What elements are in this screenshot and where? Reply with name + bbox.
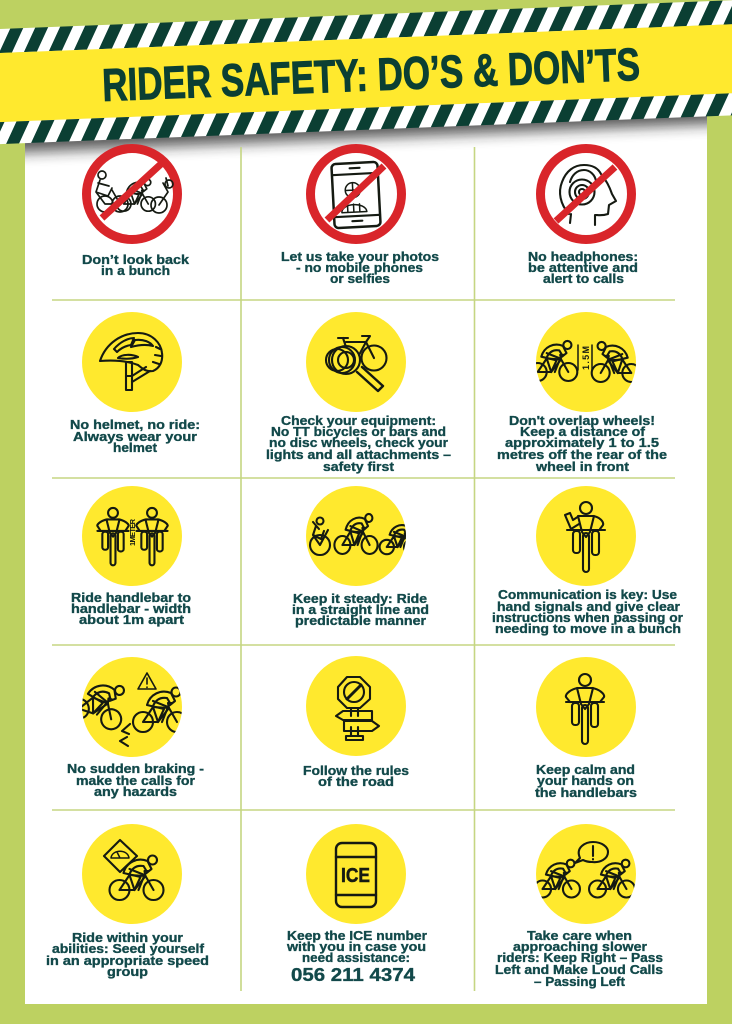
cell: don't overlap wheels [497,312,667,474]
icon: no mobile phones [310,148,402,240]
caption: with you in case you [286,939,426,954]
caption [67,761,204,799]
caption: metres off the rear of the [497,447,667,462]
caption: your hands on [537,773,634,788]
caption: Keep calm and [536,762,635,777]
cell: check equipment [266,312,451,474]
cell: ride within abilities [46,824,209,979]
icon: braking riders and hazard [82,657,182,757]
caption: make the calls for [76,773,195,788]
icon: ICE phone [306,824,406,924]
caption: hand signals and give clear [497,599,680,614]
caption: in a bunch [101,263,170,278]
caption: Keep the ICE number [287,928,427,943]
cell: handlebar to handlebar [71,486,191,627]
caption: riders: Keep Right – Pass [497,950,663,965]
cell: no sudden braking [66,657,204,799]
caption: alert to calls [543,271,624,286]
caption: – Passing Left [534,974,626,989]
caption [528,249,638,286]
caption: No headphones: [528,249,638,264]
caption: or selfies [330,271,390,286]
caption: Ride within your [72,930,183,945]
caption: No sudden braking - [67,761,204,776]
caption [82,252,190,278]
tape shadow [25,116,707,164]
icon: 1.5 metre gap [536,312,636,412]
caption: helmet [113,440,158,455]
caption: be attentive and [528,260,638,275]
caption: in a straight line and [292,602,429,617]
caption: Left and Make Loud Calls [495,962,663,977]
caption [535,762,637,800]
caption: group [107,964,148,979]
icon: riders in a line [306,486,406,586]
caption: of the road [318,774,394,789]
cell: no headphones [528,148,638,286]
caption: instructions when passing or [492,610,683,625]
caption: Keep a distance of [520,424,646,439]
cell: communication [492,486,683,636]
icon: no headphones [540,148,632,240]
distance label: 1.5M [581,346,591,370]
cell: helmet [70,312,200,455]
caption: Check your equipment: [281,413,436,428]
caption: Don’t look back [82,252,190,267]
caption [46,930,209,979]
cell: ICE number [286,824,427,985]
cell: keep it steady [292,486,429,628]
caption [303,763,409,789]
grid lines [52,147,675,991]
tape bottom stripes [0,91,732,145]
cell: don't look back [82,148,190,278]
distance label: 1METER [128,518,137,546]
caption [292,591,429,628]
caption [281,249,439,286]
icon: rider and speed sign [82,824,182,924]
caption: Ride handlebar to [71,590,191,605]
caption [70,417,200,455]
caption [495,928,663,989]
icon: riders with speech bubble [534,824,636,924]
caption: predictable manner [295,613,426,628]
caption: Don't overlap wheels! [509,413,655,428]
caption [71,590,191,627]
caption [492,587,683,636]
caption: No helmet, no ride: [70,417,200,432]
cell: slower riders [495,824,663,989]
caption: Communication is key: Use [498,587,677,602]
icon: helmet [82,312,182,412]
caption: wheel in front [535,459,630,474]
icon: no-looking-back bunch [86,148,178,240]
caption [266,413,451,474]
caption: handlebar - width [71,601,191,616]
caption: Keep it steady: Ride [293,591,427,606]
caption: about 1m apart [79,612,185,627]
caption: in an appropriate speed [46,953,209,968]
caption [497,413,667,474]
icon: front-view rider [536,657,636,757]
phone number: 056 211 4374 [291,965,415,985]
caption: approximately 1 to 1.5 [505,435,659,450]
caption: safety first [323,459,395,474]
cell: rules of the road [303,656,409,789]
caption: No TT bicycles or bars and [271,424,446,439]
icon: road sign [306,656,406,756]
caption: abilities: Seed yourself [52,941,205,956]
icon: two riders side by side [82,486,182,586]
caption: approaching slower [513,939,647,954]
caption: need assistance: [302,950,410,965]
caption: lights and all attachments – [266,447,451,462]
cell: no phones [281,148,439,286]
caption: needing to move in a bunch [495,621,681,636]
icon: rider with hand signal [536,486,636,586]
caption: Let us take your photos [281,249,439,264]
caption: Follow the rules [303,763,409,778]
caption: any hazards [94,784,177,799]
tape top stripes [0,0,732,54]
icon: bike and magnifier [306,312,406,412]
caption [286,928,427,985]
cell: keep calm [535,657,637,800]
caption: no disc wheels, check your [269,435,448,450]
tape yellow band [0,22,732,123]
caption: - no mobile phones [296,260,423,275]
title banner: hazard tape [0,0,732,145]
caption: the handlebars [535,785,637,800]
caption: Always wear your [73,429,197,444]
caption: Take care when [527,928,632,943]
icon: ICE phone: ICE [341,865,370,887]
